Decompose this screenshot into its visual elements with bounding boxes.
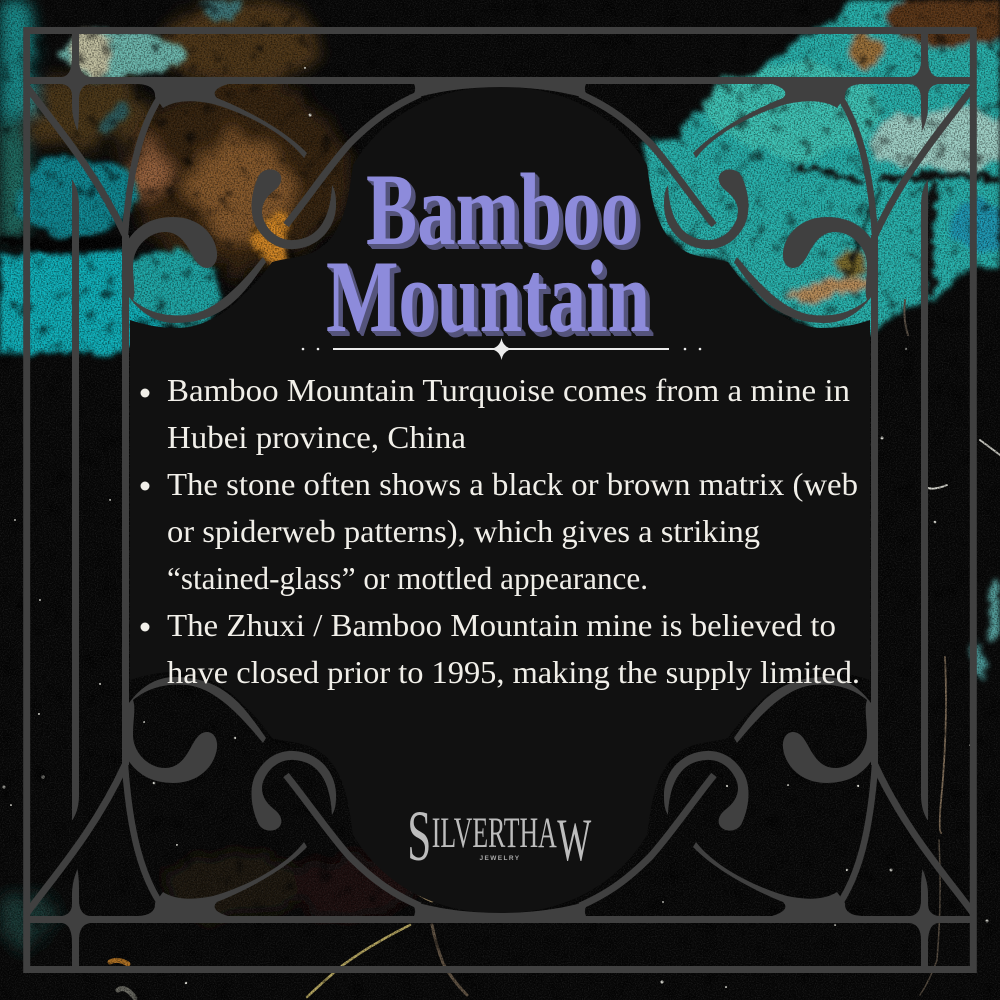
logo: Silverthaw Jewelry: ILVERTHA [432,808,557,857]
title: Bamboo [366,153,639,267]
bullet list: Hubei province, China [167,419,466,455]
bullet list: Bamboo Mountain Turquoise comes from a mine in [167,372,850,408]
central dark panel [130,87,870,913]
bullet list: have closed prior to 1995, making the supply limited. [167,654,860,690]
bullet list: or spiderweb patterns), which gives a striking [167,513,760,549]
divider with star [302,338,701,360]
bullet list: The stone often shows a black or brown matrix (web [167,466,858,502]
bullet list [140,372,860,690]
title [326,153,654,354]
logo: Silverthaw Jewelry: S [407,796,431,876]
bullet list: “stained-glass” or mottled appearance. [167,560,648,596]
logo: Silverthaw Jewelry [407,796,591,876]
bullet list: The Zhuxi / Bamboo Mountain mine is believed to [167,607,836,643]
logo: Silverthaw Jewelry: JEWELRY [480,855,520,862]
title: Mountain [326,240,650,354]
logo: Silverthaw Jewelry: W [557,807,591,873]
